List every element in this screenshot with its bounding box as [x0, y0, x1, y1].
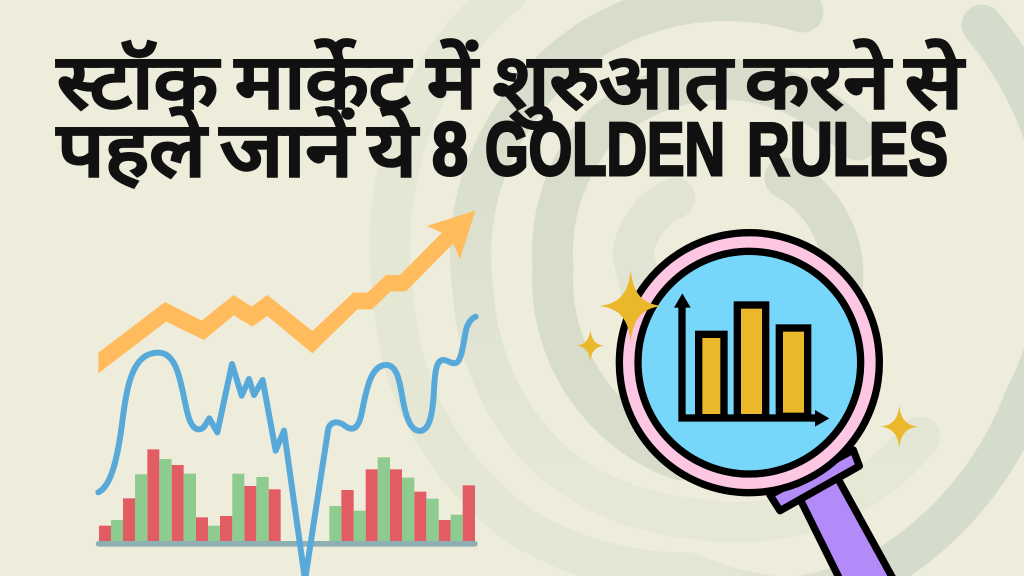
- orange trend arrow: [98, 211, 475, 373]
- title line 2: 8: [432, 107, 468, 191]
- sparkle large: [600, 270, 662, 342]
- lens ring: [619, 233, 879, 493]
- lens bar chart icon: [674, 293, 829, 427]
- title line 2: ये: [366, 106, 420, 193]
- title line 1: से: [903, 38, 966, 125]
- title line 1: शुरुआत: [493, 40, 735, 130]
- title line 2: RULES: [747, 107, 948, 191]
- title line 2: पहले: [55, 106, 209, 193]
- sparkle small: [576, 329, 604, 362]
- title line 2: [55, 106, 948, 193]
- title: [55, 38, 966, 193]
- baseline: [96, 541, 478, 547]
- title line 2: GOLDEN: [485, 107, 725, 191]
- volume bars: [99, 449, 475, 542]
- handle: [797, 473, 907, 576]
- background spiral: [390, 0, 1024, 576]
- magnifying glass: [576, 233, 918, 576]
- sparkle right: [881, 405, 918, 448]
- title line 1: मार्केट: [233, 38, 413, 125]
- blue price line: [98, 317, 476, 576]
- title line 1: करने: [743, 38, 893, 125]
- lens: [638, 251, 861, 474]
- title line 2: जानें: [218, 106, 356, 193]
- title line 1: में: [425, 38, 480, 125]
- collar: [770, 450, 859, 511]
- title line 1: स्टॉक: [55, 40, 221, 125]
- title line 1: [55, 38, 966, 130]
- stock chart: [96, 211, 478, 576]
